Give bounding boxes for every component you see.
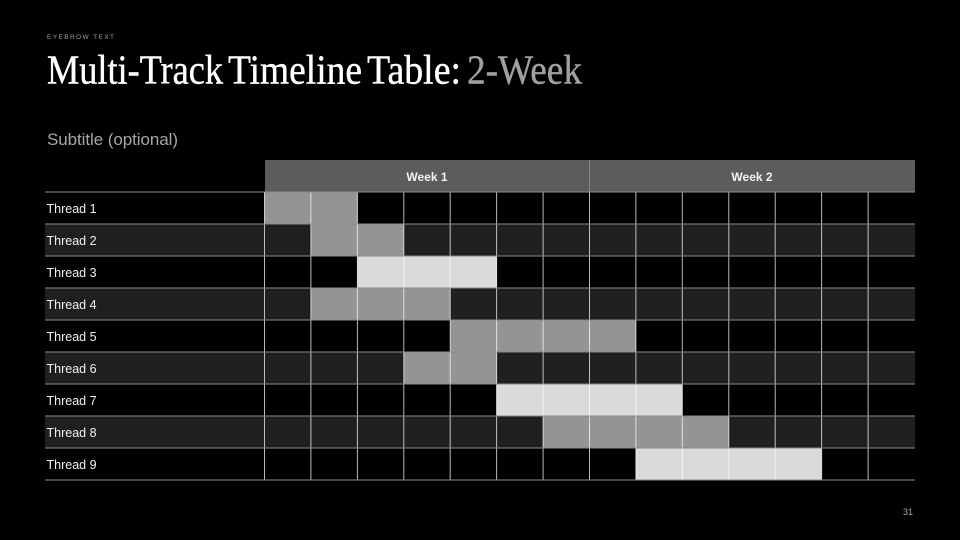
- horizontal grid lines: [45, 192, 915, 480]
- thread labels: Thread 9: [46, 458, 97, 472]
- thread labels: Thread 1: [46, 202, 97, 216]
- thread labels: Thread 8: [46, 426, 97, 440]
- title: 2-Week: [467, 46, 582, 92]
- task bars: [264, 192, 822, 480]
- subtitle: Subtitle (optional): [47, 130, 178, 149]
- title: Multi-Track: [47, 46, 223, 92]
- eyebrow: EYEBROW TEXT: [47, 34, 114, 41]
- thread labels: Thread 2: [46, 234, 97, 248]
- page number: 31: [903, 507, 913, 517]
- thread labels: [46, 202, 97, 472]
- thread labels: Thread 4: [46, 298, 97, 312]
- week headers: Week 1: [406, 170, 448, 184]
- title: Timeline: [228, 46, 362, 92]
- thread labels: Thread 7: [46, 394, 97, 408]
- timeline table: [45, 160, 915, 480]
- week headers: Week 2: [731, 170, 773, 184]
- title: Table:: [367, 46, 461, 92]
- title: [47, 46, 582, 92]
- week headers: [265, 160, 915, 192]
- thread labels: Thread 5: [46, 330, 97, 344]
- thread labels: Thread 6: [46, 362, 97, 376]
- alternating row backgrounds: [45, 224, 915, 448]
- vertical grid lines: [264, 192, 868, 480]
- thread labels: Thread 3: [46, 266, 97, 280]
